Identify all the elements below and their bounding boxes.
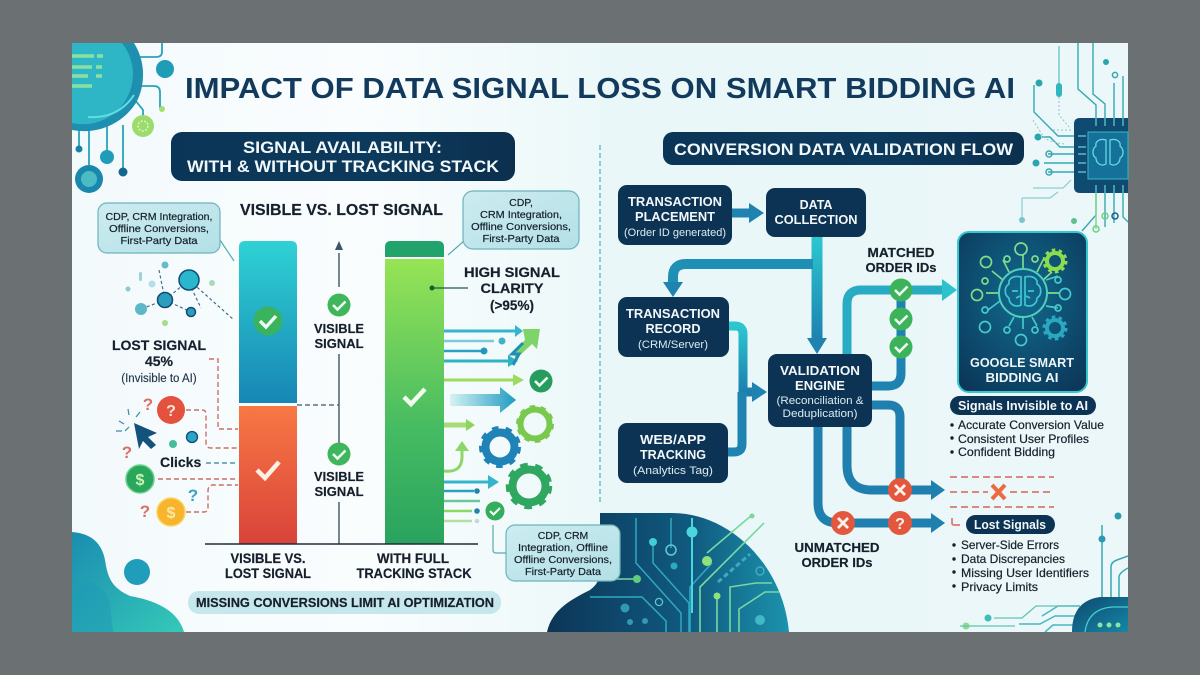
arrows: upper validation flow xyxy=(663,203,827,452)
heading: signal availability: WITH & WITHOUT TRACKING STACK xyxy=(187,157,500,176)
signal arrows upper xyxy=(444,325,524,413)
label: unmatched order IDs xyxy=(794,540,880,570)
list: lost signals: Privacy Limits xyxy=(961,580,1038,594)
banner: missing conversions: MISSING CONVERSIONS LIMIT AI OPTIMIZATION xyxy=(196,595,494,610)
icon: broken signal lines xyxy=(950,477,1054,525)
icons: unmatched markers: ? xyxy=(895,516,905,533)
axis with visible signal labels: VISIBLE xyxy=(314,322,364,336)
icon: dots xyxy=(169,432,198,448)
icon: question coin: ? xyxy=(143,395,153,414)
icon: check on lost bar xyxy=(257,462,279,478)
list: signals invisible: Accurate Conversion Value xyxy=(958,418,1104,432)
icon: yellow dollar coin xyxy=(140,486,198,526)
callout: lower data sources: Offline Conversions, xyxy=(514,554,612,566)
callout: right data sources xyxy=(448,191,579,255)
axis label: with full tracking stack xyxy=(356,551,472,581)
callout: left data sources xyxy=(98,203,234,261)
icon: check on visible bar xyxy=(254,306,282,336)
panel: google smart bidding AI xyxy=(958,232,1087,392)
label: unmatched order IDs: ORDER IDs xyxy=(802,555,872,570)
box: transaction record: TRANSACTION xyxy=(626,307,720,321)
box: transaction record xyxy=(618,297,729,357)
callout: right data sources: CRM Integration, xyxy=(480,209,562,221)
icon: question coin xyxy=(122,395,185,462)
icon: light green gear xyxy=(518,407,552,441)
label: matched order IDs: ORDER IDs xyxy=(866,260,936,275)
axis label: visible vs lost: VISIBLE VS. xyxy=(230,551,306,566)
list: lost signals: Server-Side Errors xyxy=(961,538,1059,552)
box: transaction record: (CRM/Server) xyxy=(638,339,708,351)
arrows: matched order IDs xyxy=(847,279,957,386)
heading: conversion data validation flow xyxy=(663,132,1024,165)
decoration: top-right chip xyxy=(1019,43,1128,232)
axis with visible signal labels: SIGNAL xyxy=(314,485,364,499)
chart: with full tracking stack bar xyxy=(385,241,444,544)
box: web/app tracking xyxy=(618,423,728,483)
axis with visible signal labels xyxy=(297,241,364,544)
label: matched order IDs: MATCHED xyxy=(868,245,934,260)
list: lost signals xyxy=(952,538,1089,594)
label: high signal clarity xyxy=(430,265,560,313)
pill: lost signals: Lost Signals xyxy=(974,518,1046,532)
decoration: bottom-centre circuit blob xyxy=(547,513,789,632)
callout: left data sources: CDP, CRM Integration, xyxy=(106,211,212,223)
axis with visible signal labels: SIGNAL xyxy=(314,337,364,351)
icons: matched checks xyxy=(890,278,912,358)
arrow: placement to collection xyxy=(732,203,764,223)
label: clicks: Clicks xyxy=(160,454,201,470)
label: lost signal 45%: (Invisible to AI) xyxy=(121,373,197,385)
label: unmatched order IDs: UNMATCHED xyxy=(794,540,880,555)
arrow: tracking to validation xyxy=(728,392,742,452)
list: lost signals: Missing User Identifiers xyxy=(961,566,1089,580)
decoration: bottom-right chip xyxy=(960,512,1128,632)
callout: right data sources: First-Party Data xyxy=(482,233,560,245)
icon: neural brain xyxy=(972,243,1070,346)
axis label: with full tracking stack: TRACKING STACK xyxy=(356,566,472,581)
box: transaction placement: PLACEMENT xyxy=(635,210,715,224)
label: high signal clarity: HIGH SIGNAL xyxy=(464,265,560,280)
icon: small check xyxy=(486,502,504,520)
icon: green gear xyxy=(508,465,550,507)
panel: google smart bidding AI: BIDDING AI xyxy=(986,370,1058,385)
arrow: collection to validation xyxy=(807,237,827,354)
callout: left data sources: First-Party Data xyxy=(120,235,198,247)
arrows: unmatched order IDs xyxy=(818,405,945,533)
list: signals invisible: Consistent User Profiles xyxy=(958,432,1089,446)
icons: unmatched markers xyxy=(831,478,912,535)
callout: lower data sources: Integration, Offline xyxy=(518,542,608,554)
box: transaction placement: TRANSACTION xyxy=(628,195,722,209)
icon: question coin: ? xyxy=(122,443,132,462)
box: validation engine: ENGINE xyxy=(795,379,845,393)
box: data collection: COLLECTION xyxy=(774,213,858,227)
bar: visible portion xyxy=(239,241,297,403)
icon: yellow dollar coin: ? xyxy=(188,486,198,505)
label: high signal clarity: (>95%) xyxy=(490,298,534,313)
icon: green dollar coin xyxy=(126,465,154,493)
box: web/app tracking: WEB/APP xyxy=(640,433,706,447)
icon: green check xyxy=(530,370,552,392)
axis label: with full tracking stack: WITH FULL xyxy=(377,551,449,566)
chart: visible vs lost signal bars xyxy=(239,241,297,544)
axis label: visible vs lost xyxy=(225,551,311,581)
axis with visible signal labels: VISIBLE xyxy=(314,470,364,484)
callout: lower data sources xyxy=(493,525,620,581)
label: matched order IDs xyxy=(866,245,936,275)
box: data collection: DATA xyxy=(800,198,832,212)
pill: signals invisible to AI xyxy=(950,396,1096,415)
panel divider xyxy=(599,145,601,505)
box: validation engine xyxy=(768,354,872,427)
icon: blue gear in panel xyxy=(1044,317,1066,339)
label: high signal clarity: CLARITY xyxy=(480,281,544,296)
icon: cursor xyxy=(116,409,157,449)
pill: signals invisible to AI: Signals Invisible to AI xyxy=(958,399,1088,413)
heading: signal availability: SIGNAL AVAILABILITY: xyxy=(243,138,442,157)
chart heading: VISIBLE VS. LOST SIGNAL xyxy=(240,202,443,219)
connector: clicks xyxy=(206,462,238,464)
list: signals invisible: Confident Bidding xyxy=(958,445,1055,459)
callout: lower data sources: First-Party Data xyxy=(525,566,601,578)
chart baseline xyxy=(205,543,478,545)
decoration: bottom-left wave xyxy=(72,532,184,632)
heading: signal availability xyxy=(171,132,515,181)
banner: missing conversions xyxy=(188,591,501,614)
icon: yellow dollar coin: $ xyxy=(167,505,176,522)
arrow: record to validation xyxy=(729,326,767,402)
box: web/app tracking: (Analytics Tag) xyxy=(633,465,713,477)
box: data collection xyxy=(766,188,866,237)
box: web/app tracking: TRACKING xyxy=(640,448,706,462)
list: signals invisible xyxy=(950,418,1104,459)
axis label: visible vs lost: LOST SIGNAL xyxy=(225,566,311,581)
label: lost signal 45% xyxy=(112,337,206,385)
box: transaction record: RECORD xyxy=(646,322,700,336)
icon: signal network xyxy=(126,262,234,326)
icon: green gear in panel xyxy=(1044,250,1066,272)
icon: green dollar coin: $ xyxy=(136,472,145,489)
background: left panel xyxy=(72,43,600,632)
icon: growth arrow xyxy=(512,329,540,365)
arrow: collection to record xyxy=(663,264,813,297)
box: transaction placement xyxy=(618,185,732,245)
label: lost signal 45%: 45% xyxy=(145,353,174,369)
icon: question coin: ? xyxy=(166,403,176,420)
box: validation engine: (Reconciliation & xyxy=(776,395,864,407)
panel: google smart bidding AI: GOOGLE SMART xyxy=(970,355,1074,370)
bar: top segment xyxy=(385,241,444,257)
pill: lost signals xyxy=(966,515,1055,534)
icon: yellow dollar coin: ? xyxy=(140,502,150,521)
callout: lower data sources: CDP, CRM xyxy=(538,530,588,542)
connectors: lost signals to bar xyxy=(158,359,238,512)
icon: check on green bar xyxy=(404,389,425,404)
signal arrows lower xyxy=(444,419,499,523)
icon: blue gear xyxy=(481,428,519,466)
box: transaction placement: (Order ID generated) xyxy=(624,227,726,239)
callout: left data sources: Offline Conversions, xyxy=(109,223,209,235)
label: lost signal 45%: LOST SIGNAL xyxy=(112,337,206,353)
decoration: top-left circuit xyxy=(72,43,174,193)
bar: lost portion xyxy=(239,406,297,544)
heading: conversion data validation flow: CONVERSION DATA VALIDATION FLOW xyxy=(674,140,1014,159)
bar: main segment xyxy=(385,259,444,544)
title: IMPACT OF DATA SIGNAL LOSS ON SMART BIDDING AI xyxy=(185,73,1015,105)
callout: right data sources: CDP, xyxy=(509,197,533,209)
box: validation engine: Deduplication) xyxy=(782,408,858,420)
box: validation engine: VALIDATION xyxy=(780,364,860,378)
list: lost signals: Data Discrepancies xyxy=(961,552,1065,566)
background: right panel xyxy=(600,43,1128,632)
callout: right data sources: Offline Conversions, xyxy=(471,221,571,233)
